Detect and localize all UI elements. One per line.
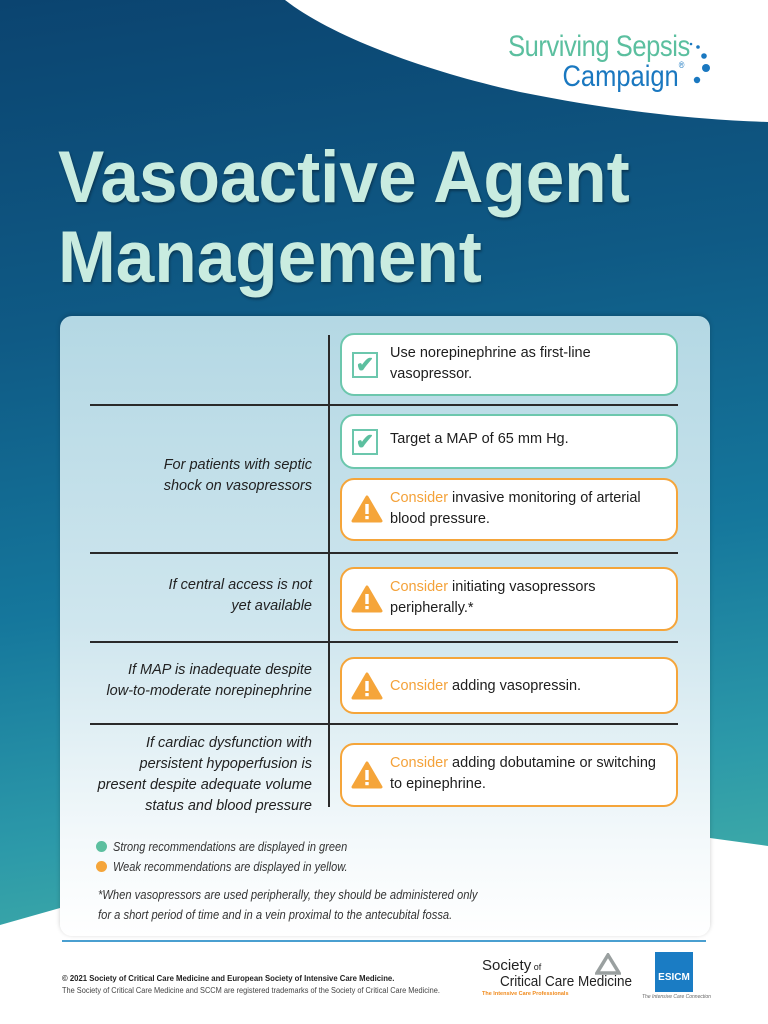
logo: ESICM xyxy=(642,952,711,1000)
left text: septic shock: shock on vasopressors xyxy=(164,478,312,494)
box: target MAP xyxy=(340,414,678,469)
box: invasive monitoring xyxy=(340,478,678,541)
left text: MAP inadequate: If MAP is inadequate despite xyxy=(128,662,312,678)
legend: Weak recommendations are displayed in yellow. xyxy=(113,860,348,874)
box: dobutamine: Consider adding dobutamine or switching xyxy=(390,755,656,771)
box: dobutamine xyxy=(340,743,678,807)
box: dobutamine: to epinephrine. xyxy=(390,776,486,792)
logo: ESICM: ESICM xyxy=(658,972,690,983)
box: peripherally: Consider initiating vasopressors xyxy=(390,579,596,595)
left text: central access: If central access is not xyxy=(169,577,312,593)
copyright xyxy=(62,973,440,995)
title xyxy=(58,137,631,300)
logo: Surviving Sepsis Campaign xyxy=(508,30,710,93)
logo: Surviving Sepsis Campaign: Surviving Sepsis xyxy=(508,30,690,63)
logo: SCCM: Critical Care Medicine xyxy=(500,973,632,990)
box: vasopressin: Consider adding vasopressin. xyxy=(390,678,581,694)
title: Management xyxy=(58,217,482,298)
left text: septic shock: For patients with septic xyxy=(164,457,312,473)
legend xyxy=(96,840,348,874)
title: Vasoactive Agent xyxy=(58,137,630,218)
footnote xyxy=(98,887,478,922)
box: norepinephrine xyxy=(340,333,678,396)
box: norepinephrine: ✔ xyxy=(356,352,374,377)
box: invasive monitoring: blood pressure. xyxy=(390,511,490,527)
logo: SCCM: Society of xyxy=(482,957,541,974)
box: norepinephrine: vasopressor. xyxy=(390,366,472,382)
box: peripherally xyxy=(340,567,678,631)
left text: cardiac dysfunction: present despite adequate volume xyxy=(98,777,312,793)
legend: Strong recommendations are displayed in green xyxy=(113,840,347,854)
logo: SCCM xyxy=(482,953,632,997)
left text: cardiac dysfunction: status and blood pressure xyxy=(145,798,312,814)
footnote: for a short period of time and in a vein proximal to the antecubital fossa. xyxy=(98,907,452,922)
footer divider xyxy=(62,940,706,942)
logo: SCCM: The Intensive Care Professionals xyxy=(482,991,569,997)
left text: MAP inadequate: low-to-moderate norepinephrine xyxy=(106,683,312,699)
logo: Surviving Sepsis Campaign: Campaign® xyxy=(562,60,684,93)
box: invasive monitoring: Consider invasive monitoring of arterial xyxy=(390,490,641,506)
copyright: © 2021 Society of Critical Care Medicine and European Society of Intensive Care Medicine. xyxy=(62,973,394,983)
box: norepinephrine: Use norepinephrine as first-line xyxy=(390,345,591,361)
left text: cardiac dysfunction: If cardiac dysfunction with xyxy=(146,735,312,751)
box: vasopressin xyxy=(340,657,678,714)
left text: cardiac dysfunction: persistent hypoperfusion is xyxy=(140,756,312,772)
panel xyxy=(60,316,710,936)
box: target MAP: ✔ xyxy=(356,429,374,454)
left text: MAP inadequate xyxy=(106,662,312,699)
left text: cardiac dysfunction xyxy=(97,735,312,814)
logo: ESICM: The Intensive Care Connection xyxy=(642,994,711,1000)
copyright: The Society of Critical Care Medicine and SCCM are registered trademarks of the Society of Critical Care Medicine. xyxy=(62,985,440,995)
footnote: *When vasopressors are used peripherally, they should be administered only xyxy=(98,887,478,902)
left text: septic shock xyxy=(164,457,312,494)
box: target MAP: Target a MAP of 65 mm Hg. xyxy=(390,431,569,447)
left text: central access: yet available xyxy=(231,598,312,614)
table lines xyxy=(328,335,330,807)
left text: central access xyxy=(169,577,312,614)
box: peripherally: peripherally.* xyxy=(390,600,474,616)
